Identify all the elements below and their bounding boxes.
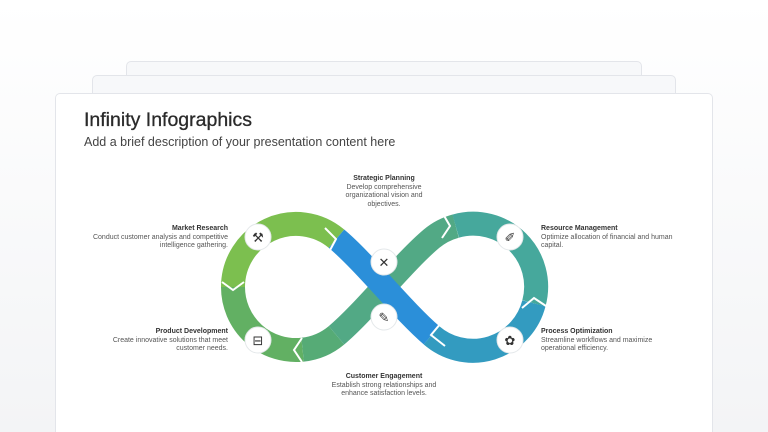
text: process optimization: Streamline workflows and maximize operational efficiency. — [541, 337, 652, 352]
title: Infinity Infographics — [84, 109, 252, 131]
text: product development: Product Development — [156, 328, 228, 335]
text: resource management — [541, 225, 673, 249]
infinity diagram: ✿ — [505, 334, 516, 349]
text: customer engagement: Customer Engagement — [346, 373, 422, 380]
subtitle: Add a brief description of your presentation content here — [84, 135, 395, 149]
text: process optimization — [541, 328, 652, 352]
back card 3 — [126, 61, 642, 123]
text: market research — [93, 224, 228, 249]
infinity diagram: ✕ — [379, 256, 389, 271]
back card 2 — [92, 75, 676, 137]
text: market research: Conduct customer analysis and competitive intelligence gathering. — [93, 234, 228, 249]
infinity diagram: ⚒ — [252, 231, 264, 246]
text: product development: Create innovative solutions that meet customer needs. — [113, 337, 228, 352]
infinity diagram: ✎ — [379, 311, 389, 326]
infinity diagram: ⊟ — [253, 334, 263, 349]
text: market research: Market Research — [172, 225, 228, 232]
text: process optimization: Process Optimization — [541, 328, 613, 335]
text: resource management: Resource Management — [541, 225, 618, 232]
text: customer engagement: Establish strong relationships and enhance satisfaction levels. — [332, 382, 436, 397]
infinity diagram: ✐ — [505, 231, 515, 246]
text: customer engagement — [332, 373, 436, 397]
text: product development — [113, 328, 228, 352]
main card — [55, 93, 713, 432]
text: strategic planning: Strategic Planning — [353, 175, 415, 182]
text: strategic planning: Develop comprehensive organizational vision and objectives. — [345, 184, 423, 208]
text: resource management: Optimize allocation of financial and human capital. — [541, 234, 673, 249]
